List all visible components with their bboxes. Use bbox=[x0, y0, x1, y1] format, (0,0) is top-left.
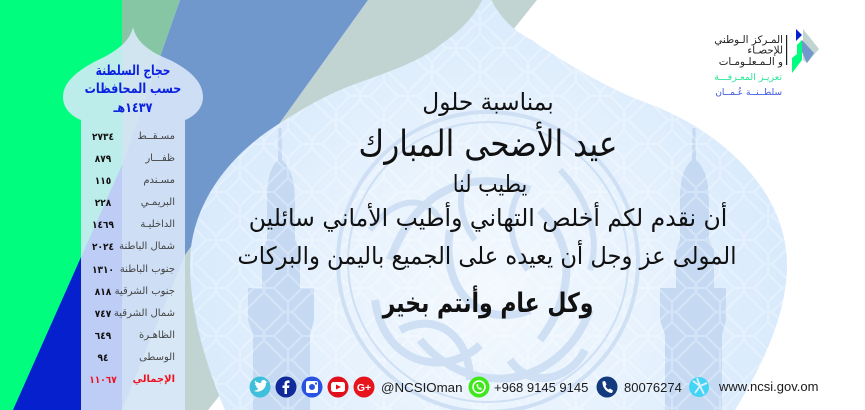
icon: google plus bbox=[354, 376, 374, 398]
table of governorates: ٢٢٨ bbox=[95, 198, 112, 209]
background: blue band bbox=[122, 0, 368, 410]
handle: @NCSIOman bbox=[381, 380, 462, 395]
heading: Eid al-Adha: عيد الأضحى المبارك bbox=[359, 121, 617, 165]
greeting text block: بمناسبة حلول bbox=[422, 88, 554, 116]
icon: google plus: G+ bbox=[357, 382, 371, 394]
greeting text block: المولى عز وجل أن يعيده على الجميع باليمن والبركات bbox=[238, 240, 736, 270]
background: dark blue triangle bbox=[13, 165, 122, 410]
greeting text block: أن نقدم لكم أخلص التهاني وأطيب الأماني سائلين bbox=[249, 202, 727, 232]
icon: globe bbox=[689, 377, 709, 397]
table of governorates: مسـندم bbox=[143, 175, 175, 186]
icon: instagram bbox=[302, 376, 322, 398]
logo organisation name bbox=[714, 34, 783, 68]
icon: twitter bbox=[250, 376, 270, 398]
icon: youtube bbox=[328, 376, 348, 398]
table of governorates: ٩٤ bbox=[98, 353, 108, 364]
total row: الإجمالي bbox=[133, 374, 175, 385]
table of governorates: ١١٥ bbox=[95, 176, 111, 187]
logo country: سلطــنــة عُـمــان bbox=[715, 87, 782, 98]
panel heading: ١٤٣٧هـ bbox=[113, 99, 153, 115]
table of governorates: مسـقــط bbox=[137, 131, 175, 142]
table of governorates bbox=[89, 131, 175, 386]
table of governorates: ظفـــار bbox=[144, 153, 175, 164]
icon: right minaret silhouette bbox=[660, 128, 726, 410]
table of governorates: الظاهـرة bbox=[139, 330, 175, 341]
table of governorates: الداخليـة bbox=[140, 219, 175, 230]
logo organisation name: و الـمـعلـومـات bbox=[719, 56, 783, 68]
logo organisation name: المـركز الـوطني bbox=[714, 34, 783, 46]
lattice pattern overlay bbox=[180, 0, 800, 410]
greeting text block: يطيب لنا bbox=[453, 171, 527, 198]
table of governorates: جنوب الباطنة bbox=[120, 264, 175, 275]
table of governorates: شمال الباطنة bbox=[119, 241, 175, 252]
table of governorates: البريمـي bbox=[141, 197, 175, 208]
panel heading: حجاج السلطنة bbox=[96, 63, 170, 78]
table of governorates: جنوب الشرقية bbox=[115, 286, 175, 297]
icon: left minaret silhouette bbox=[248, 128, 314, 410]
table of governorates: الوسطى bbox=[139, 352, 175, 363]
table of governorates: ٦٤٩ bbox=[95, 331, 112, 342]
greeting text block: وكل عام وأنتم بخير bbox=[381, 285, 593, 320]
panel dome background bbox=[63, 27, 203, 410]
panel: pilgrims by governorate bbox=[63, 27, 203, 410]
icon: facebook bbox=[276, 376, 296, 398]
logo tagline: تعزيـز المعـرفـــة bbox=[714, 72, 782, 83]
table of governorates: ٧٤٧ bbox=[95, 309, 112, 320]
background: sage band bbox=[122, 0, 537, 410]
main dome background bbox=[180, 0, 800, 410]
background: teal triangle bbox=[122, 0, 180, 165]
table of governorates: ٢٧٣٤ bbox=[92, 132, 114, 143]
table of governorates: شمال الشرقية bbox=[114, 308, 175, 319]
background: green field bbox=[0, 0, 122, 410]
table of governorates: ٢٠٢٤ bbox=[92, 242, 114, 253]
table of governorates: ١٣١٠ bbox=[92, 265, 114, 276]
total row: ١١٠٦٧ bbox=[89, 375, 117, 386]
table of governorates: ٨٧٩ bbox=[95, 154, 112, 165]
website: www.ncsi.gov.om bbox=[718, 379, 818, 394]
table of governorates: ٨١٨ bbox=[95, 287, 112, 298]
phone number: +968 9145 9145 bbox=[494, 380, 588, 395]
panel heading bbox=[85, 63, 181, 115]
logo organisation name: للإحصـاء bbox=[747, 44, 783, 56]
greeting text block bbox=[238, 88, 736, 320]
icon: whatsapp bbox=[468, 376, 490, 398]
total row bbox=[89, 374, 175, 386]
logo bbox=[714, 29, 819, 98]
icon: logo mark bbox=[792, 29, 819, 73]
toll-free number: 80076274 bbox=[624, 380, 682, 395]
panel heading: حسب المحافظات bbox=[85, 80, 181, 96]
contact bar bbox=[250, 376, 818, 398]
calligraphy medallion bbox=[338, 112, 638, 410]
table of governorates: ١٤٦٩ bbox=[92, 220, 114, 231]
icon: telephone bbox=[596, 376, 618, 398]
